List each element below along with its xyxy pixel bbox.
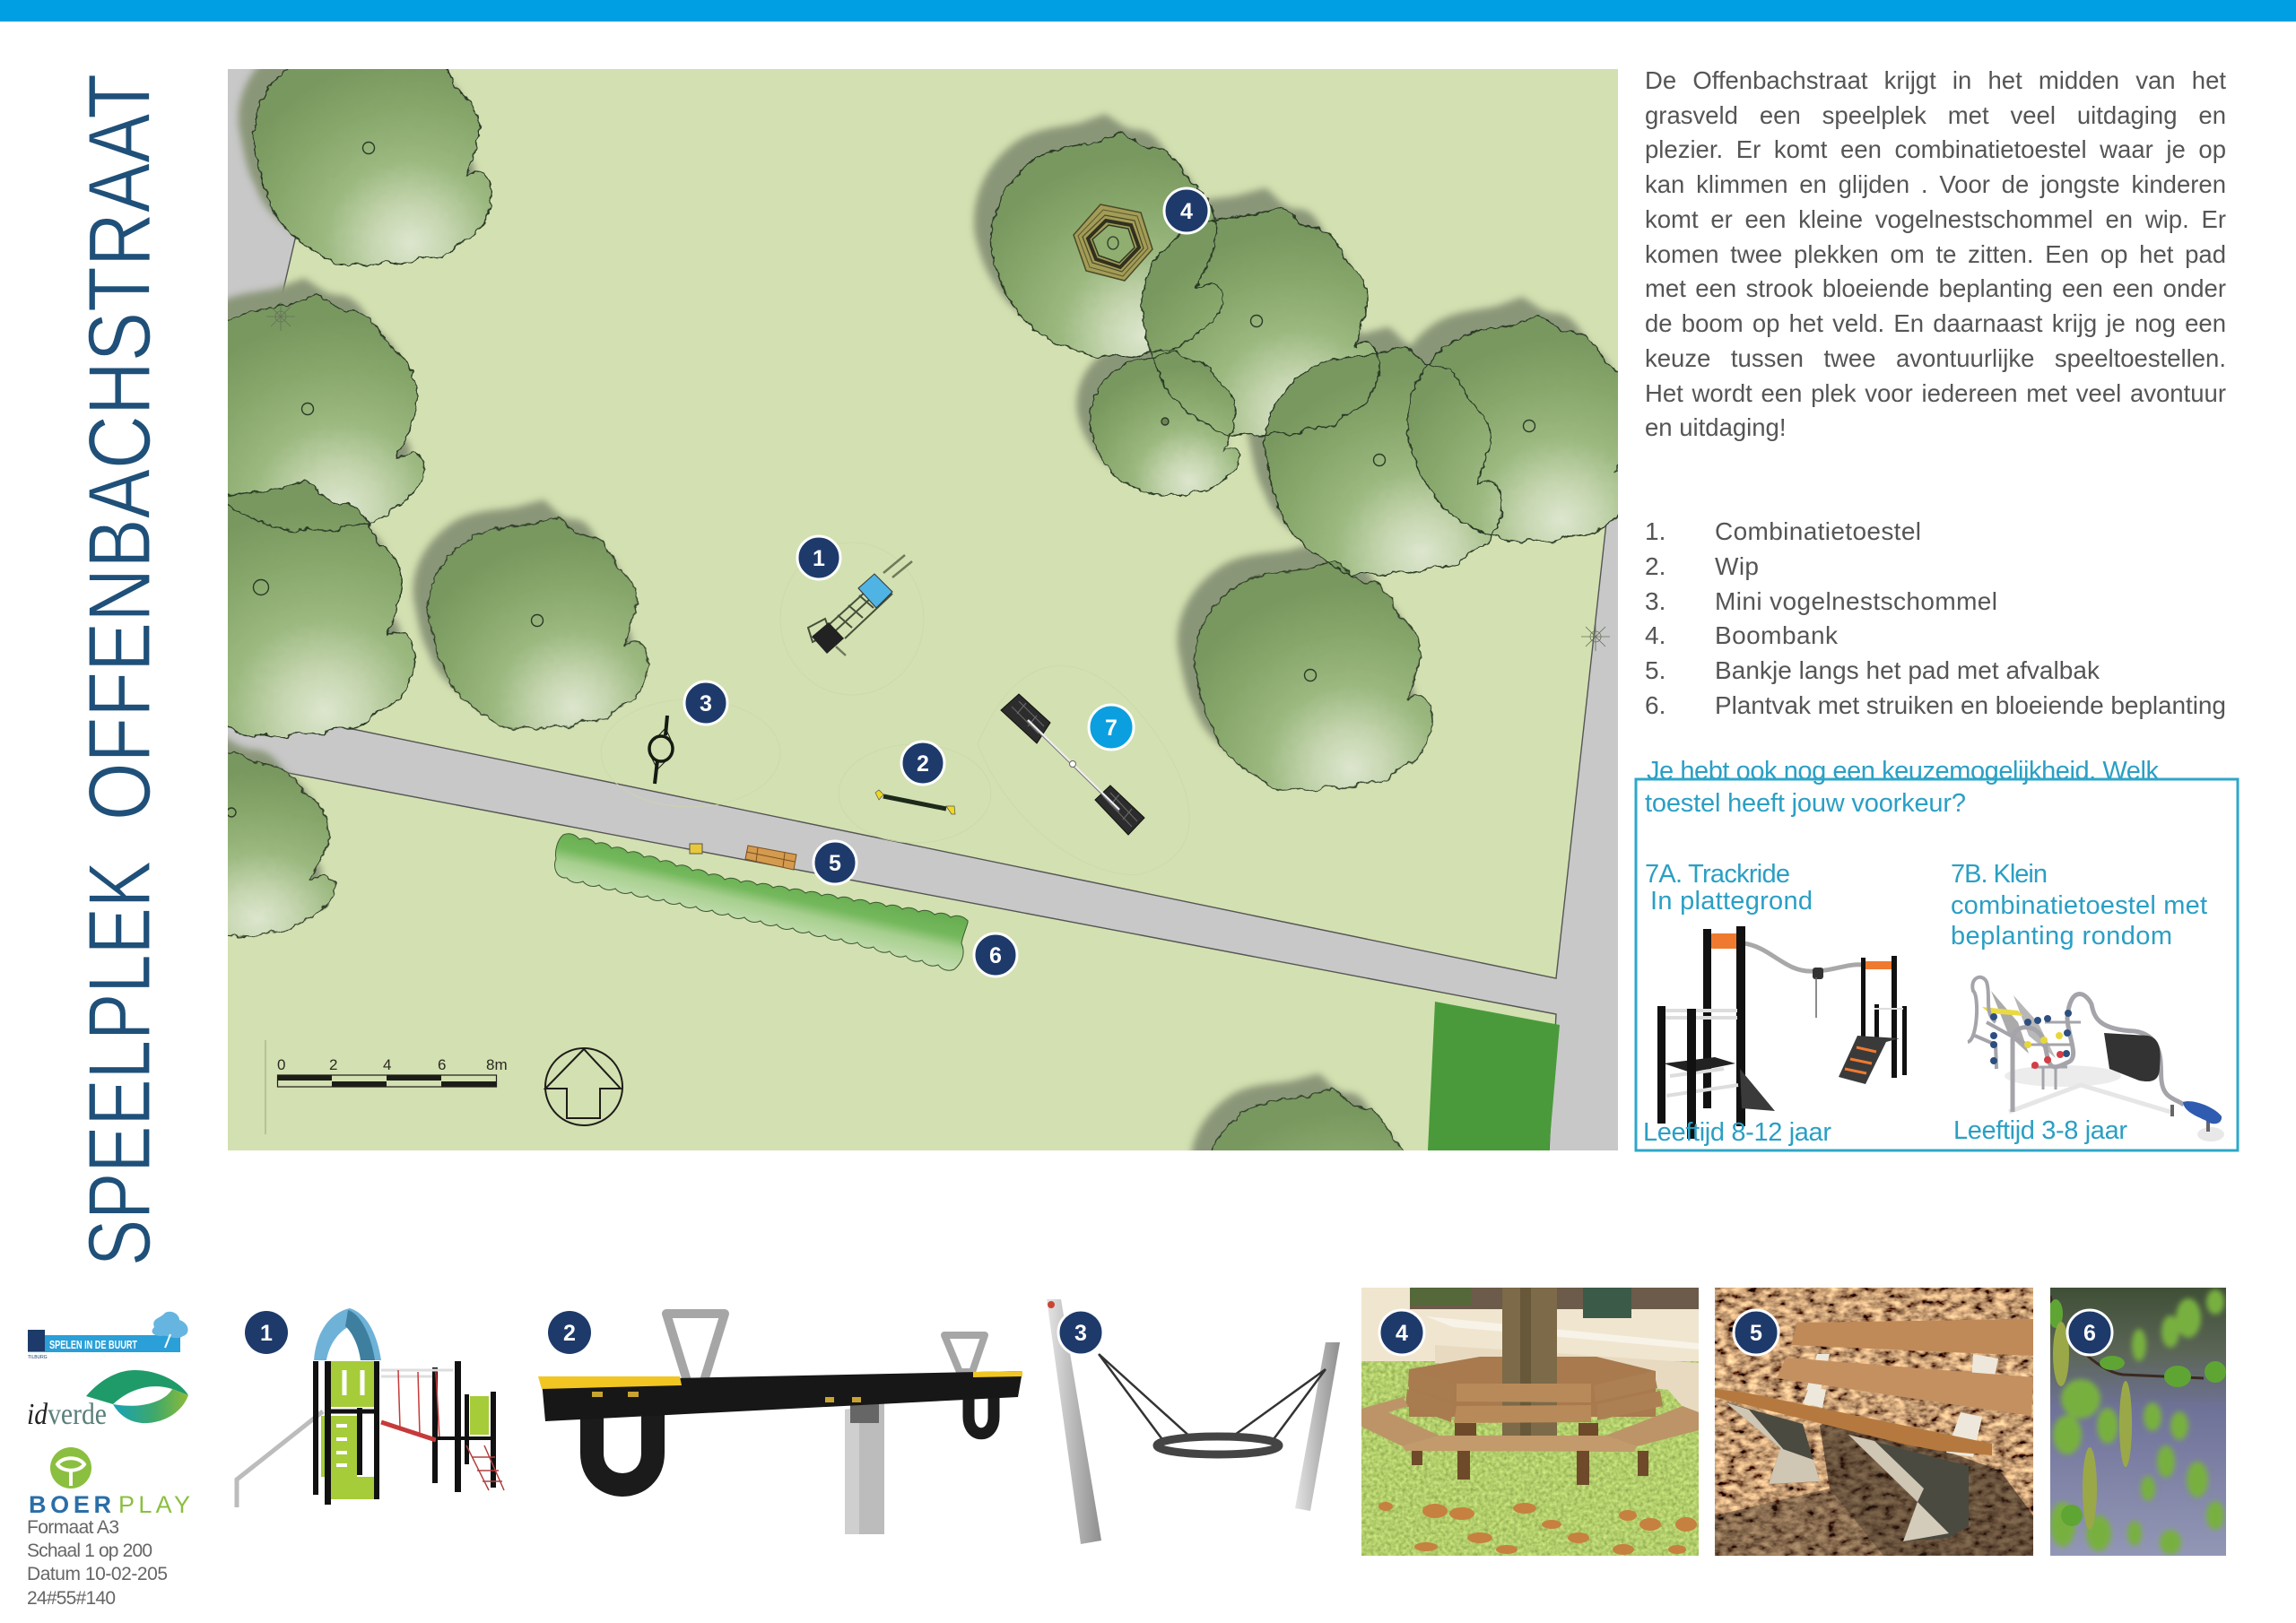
panel: choice 7A 7B bbox=[1636, 757, 2238, 1150]
row badge 4: 4 bbox=[1396, 1321, 1408, 1346]
7B heading: combinatietoestel met bbox=[1951, 891, 2207, 920]
intro text block: keuze tussen twee avontuurlijke speeltoestellen. bbox=[1645, 344, 2226, 372]
choice heading: toestel heeft jouw voorkeur? bbox=[1645, 789, 1966, 818]
row badge 4 bbox=[1379, 1310, 1424, 1355]
numbered list: Boombank bbox=[1715, 621, 1839, 649]
drawing metadata: Schaal 1 op 200 bbox=[27, 1541, 152, 1561]
intro text block: Het wordt een plek voor iedereen met veel avontuur bbox=[1645, 379, 2226, 407]
7A heading: 7A. Trackride bbox=[1645, 860, 1790, 889]
7A heading bbox=[1645, 860, 1813, 916]
choice box border bbox=[1636, 779, 2238, 1150]
path: diagonal bbox=[227, 703, 1556, 1014]
row badge 3 bbox=[1058, 1310, 1103, 1355]
age labels bbox=[1643, 1116, 2127, 1147]
drawing metadata: Datum 10-02-205 bbox=[27, 1564, 168, 1584]
photo 5: park bench bbox=[1715, 1288, 2033, 1556]
choice heading bbox=[1645, 757, 2160, 818]
drawing metadata: Formaat A3 bbox=[27, 1517, 119, 1538]
logo: Spelen in de buurt: TILBURG bbox=[28, 1355, 48, 1360]
row badge 6: 6 bbox=[2083, 1321, 2096, 1346]
intro text block: de boom op het veld. En daarnaast krijg je nog een bbox=[1645, 309, 2226, 337]
intro text block: en uitdaging! bbox=[1645, 413, 1787, 441]
numbered list: 6. bbox=[1645, 691, 1665, 719]
photo 6: catkins and leaves bbox=[2048, 1288, 2226, 1556]
row badge 3: 3 bbox=[1074, 1321, 1087, 1346]
scale bar: 2 bbox=[329, 1056, 337, 1073]
logo: Spelen in de buurt bbox=[28, 1312, 188, 1360]
equipment 2: seesaw plan bbox=[875, 790, 955, 814]
numbered list: 2. bbox=[1645, 552, 1665, 580]
logo: Boerplay bbox=[29, 1447, 190, 1518]
numbered list bbox=[1645, 517, 2226, 719]
tree canopies bbox=[228, 69, 1618, 1150]
numbered list: 1. bbox=[1645, 517, 1665, 545]
badge 5: 5 bbox=[829, 851, 841, 876]
scale bar: 0 bbox=[277, 1056, 285, 1073]
illustration 3: nest swing bbox=[1047, 1299, 1340, 1544]
illustration: trackride bbox=[1657, 926, 1907, 1139]
illustration 1: combination unit bbox=[237, 1308, 504, 1507]
equipment 3: nest swing plan bbox=[649, 716, 673, 784]
equipment 4: hexagonal tree bench bbox=[1074, 204, 1152, 281]
badge 2: 2 bbox=[917, 751, 929, 777]
7A heading: In plattegrond bbox=[1650, 887, 1813, 916]
equipment 7: trackride plan bbox=[1001, 694, 1144, 835]
choice heading: Je hebt ook nog een keuzemogelijkheid. Welk bbox=[1647, 757, 2160, 785]
row badge 5 bbox=[1734, 1310, 1779, 1355]
equipment 5: bench and bin plan bbox=[690, 844, 796, 870]
scale bar bbox=[265, 1040, 508, 1134]
logo: Spelen in de buurt: SPELEN IN DE BUURT bbox=[49, 1338, 137, 1351]
age labels: Leeftijd 8-12 jaar bbox=[1643, 1118, 1831, 1147]
badge 6: 6 bbox=[989, 943, 1002, 968]
title bbox=[70, 74, 169, 1266]
icon: small shrubs bbox=[266, 302, 1610, 651]
logo: idverde: idverde bbox=[27, 1398, 107, 1431]
intro text block: kan klimmen en glijden . Voor de jongste kinderen bbox=[1645, 170, 2226, 198]
age labels: Leeftijd 3-8 jaar bbox=[1953, 1116, 2127, 1145]
7B heading: beplanting rondom bbox=[1951, 922, 2172, 950]
7B heading bbox=[1951, 860, 2207, 950]
lawn bbox=[228, 69, 1618, 1150]
top bar bbox=[0, 0, 2296, 22]
intro text block: grasveld een speelplek met veel uitdaging en bbox=[1645, 101, 2226, 129]
intro text block: komt er een kleine vogelnestschommel en wip. Er bbox=[1645, 205, 2226, 233]
tree shadows bbox=[228, 69, 1618, 1150]
logo: Boerplay: PLAY bbox=[118, 1491, 190, 1518]
scale bar: 6 bbox=[438, 1056, 446, 1073]
row badge 5: 5 bbox=[1750, 1321, 1762, 1346]
badge 6 bbox=[974, 933, 1017, 976]
logo: idverde bbox=[27, 1370, 188, 1431]
logo: Boerplay: BOER bbox=[29, 1491, 111, 1518]
photo 4: tree bench bbox=[1361, 1288, 1699, 1556]
badge row: product numbers bbox=[245, 1310, 2112, 1355]
play zones bbox=[601, 542, 1189, 874]
badge 3 bbox=[684, 681, 727, 725]
tree trunks bbox=[227, 142, 1535, 817]
intro text block: komen twee plekken om te zitten. Een op het pad bbox=[1645, 240, 2226, 268]
scale bar: 8m bbox=[486, 1056, 508, 1073]
intro text block: met een strook bloeiende beplanting een een onder bbox=[1645, 274, 2226, 302]
badge 1 bbox=[797, 536, 840, 579]
row badge 6 bbox=[2067, 1310, 2112, 1355]
badge 7: 7 bbox=[1105, 716, 1118, 741]
badge 2 bbox=[901, 742, 944, 785]
row badge 2: 2 bbox=[563, 1321, 576, 1346]
row badge 2 bbox=[548, 1311, 591, 1354]
row badge 1 bbox=[245, 1311, 288, 1354]
scale bar: 4 bbox=[383, 1056, 391, 1073]
tree outlines bbox=[228, 69, 1618, 1150]
intro text block: plezier. Er komt een combinatietoestel waar je op bbox=[1645, 135, 2226, 163]
green planting plot bbox=[1428, 1002, 1560, 1150]
numbered list: 4. bbox=[1645, 621, 1665, 649]
row badge 1: 1 bbox=[260, 1321, 273, 1346]
equipment 1: combination plan bbox=[808, 555, 912, 655]
illustration: small combination bbox=[1968, 977, 2224, 1141]
badge 3: 3 bbox=[700, 691, 712, 716]
path edges bbox=[283, 238, 1607, 1150]
panel: site plan map bbox=[93, 21, 1641, 1298]
7B heading: 7B. Klein bbox=[1951, 860, 2048, 889]
numbered list: 5. bbox=[1645, 656, 1665, 684]
title: SPEELPLEK bbox=[70, 861, 169, 1266]
path: right side bbox=[1550, 518, 1618, 1150]
badge 4 bbox=[1164, 188, 1209, 233]
numbered list: Combinatietoestel bbox=[1715, 517, 1921, 545]
numbered list: Bankje langs het pad met afvalbak bbox=[1715, 656, 2100, 684]
numbered list: 3. bbox=[1645, 587, 1665, 615]
icon: north arrow bbox=[545, 1048, 622, 1125]
path: upper left bbox=[228, 69, 294, 299]
badge 5 bbox=[813, 841, 857, 884]
illustration 2: seesaw bbox=[538, 1314, 1022, 1534]
badge 4: 4 bbox=[1180, 199, 1193, 224]
planting bed bbox=[554, 834, 968, 970]
drawing metadata: 24#55#140 bbox=[27, 1588, 116, 1609]
intro text block: De Offenbachstraat krijgt in het midden van het bbox=[1645, 66, 2226, 94]
badge 1: 1 bbox=[813, 546, 825, 571]
numbered list: Mini vogelnestschommel bbox=[1715, 587, 1997, 615]
drawing metadata bbox=[27, 1517, 168, 1609]
numbered list: Wip bbox=[1715, 552, 1759, 580]
badge 7 bbox=[1089, 705, 1134, 750]
numbered list: Plantvak met struiken en bloeiende beplanting bbox=[1715, 691, 2226, 719]
